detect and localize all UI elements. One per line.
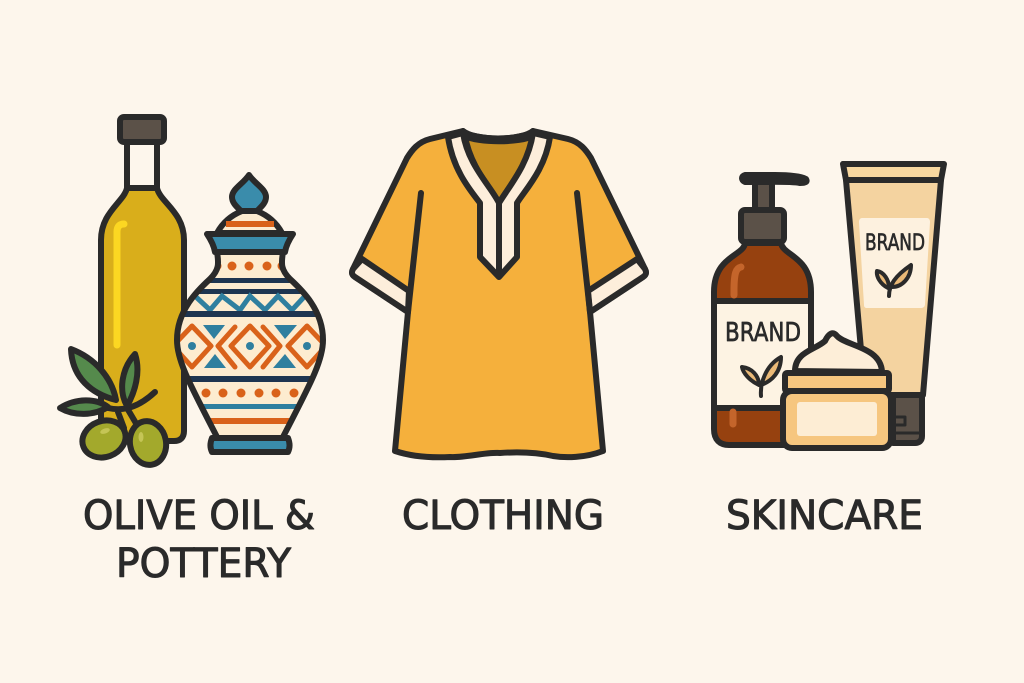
panel: skincare	[714, 164, 944, 539]
icon: painted pottery vase	[170, 175, 330, 452]
panel: olive oil and pottery	[60, 117, 330, 587]
icon: olive branch	[60, 349, 170, 468]
infographic canvas	[57, 114, 947, 578]
icon: cream jar	[783, 333, 891, 448]
panel: clothing	[352, 131, 646, 539]
heading: skincare: SKINCARE	[726, 493, 923, 539]
icon: tube leaf sprout	[877, 265, 911, 296]
heading: olive oil and pottery	[83, 493, 315, 587]
label text: tube brand: BRAND	[865, 231, 925, 256]
heading: olive oil and pottery: POTTERY	[116, 541, 292, 587]
icon: pump bottle	[714, 175, 811, 445]
icon: olive oil bottle	[101, 117, 184, 441]
icon: tunic shirt	[352, 131, 646, 457]
heading: olive oil and pottery: OLIVE OIL &	[83, 493, 315, 539]
icon: bottle leaf sprout	[742, 357, 781, 396]
icon: cream tube	[843, 164, 944, 443]
label text: bottle brand: BRAND	[725, 318, 801, 348]
heading: clothing: CLOTHING	[402, 493, 604, 539]
